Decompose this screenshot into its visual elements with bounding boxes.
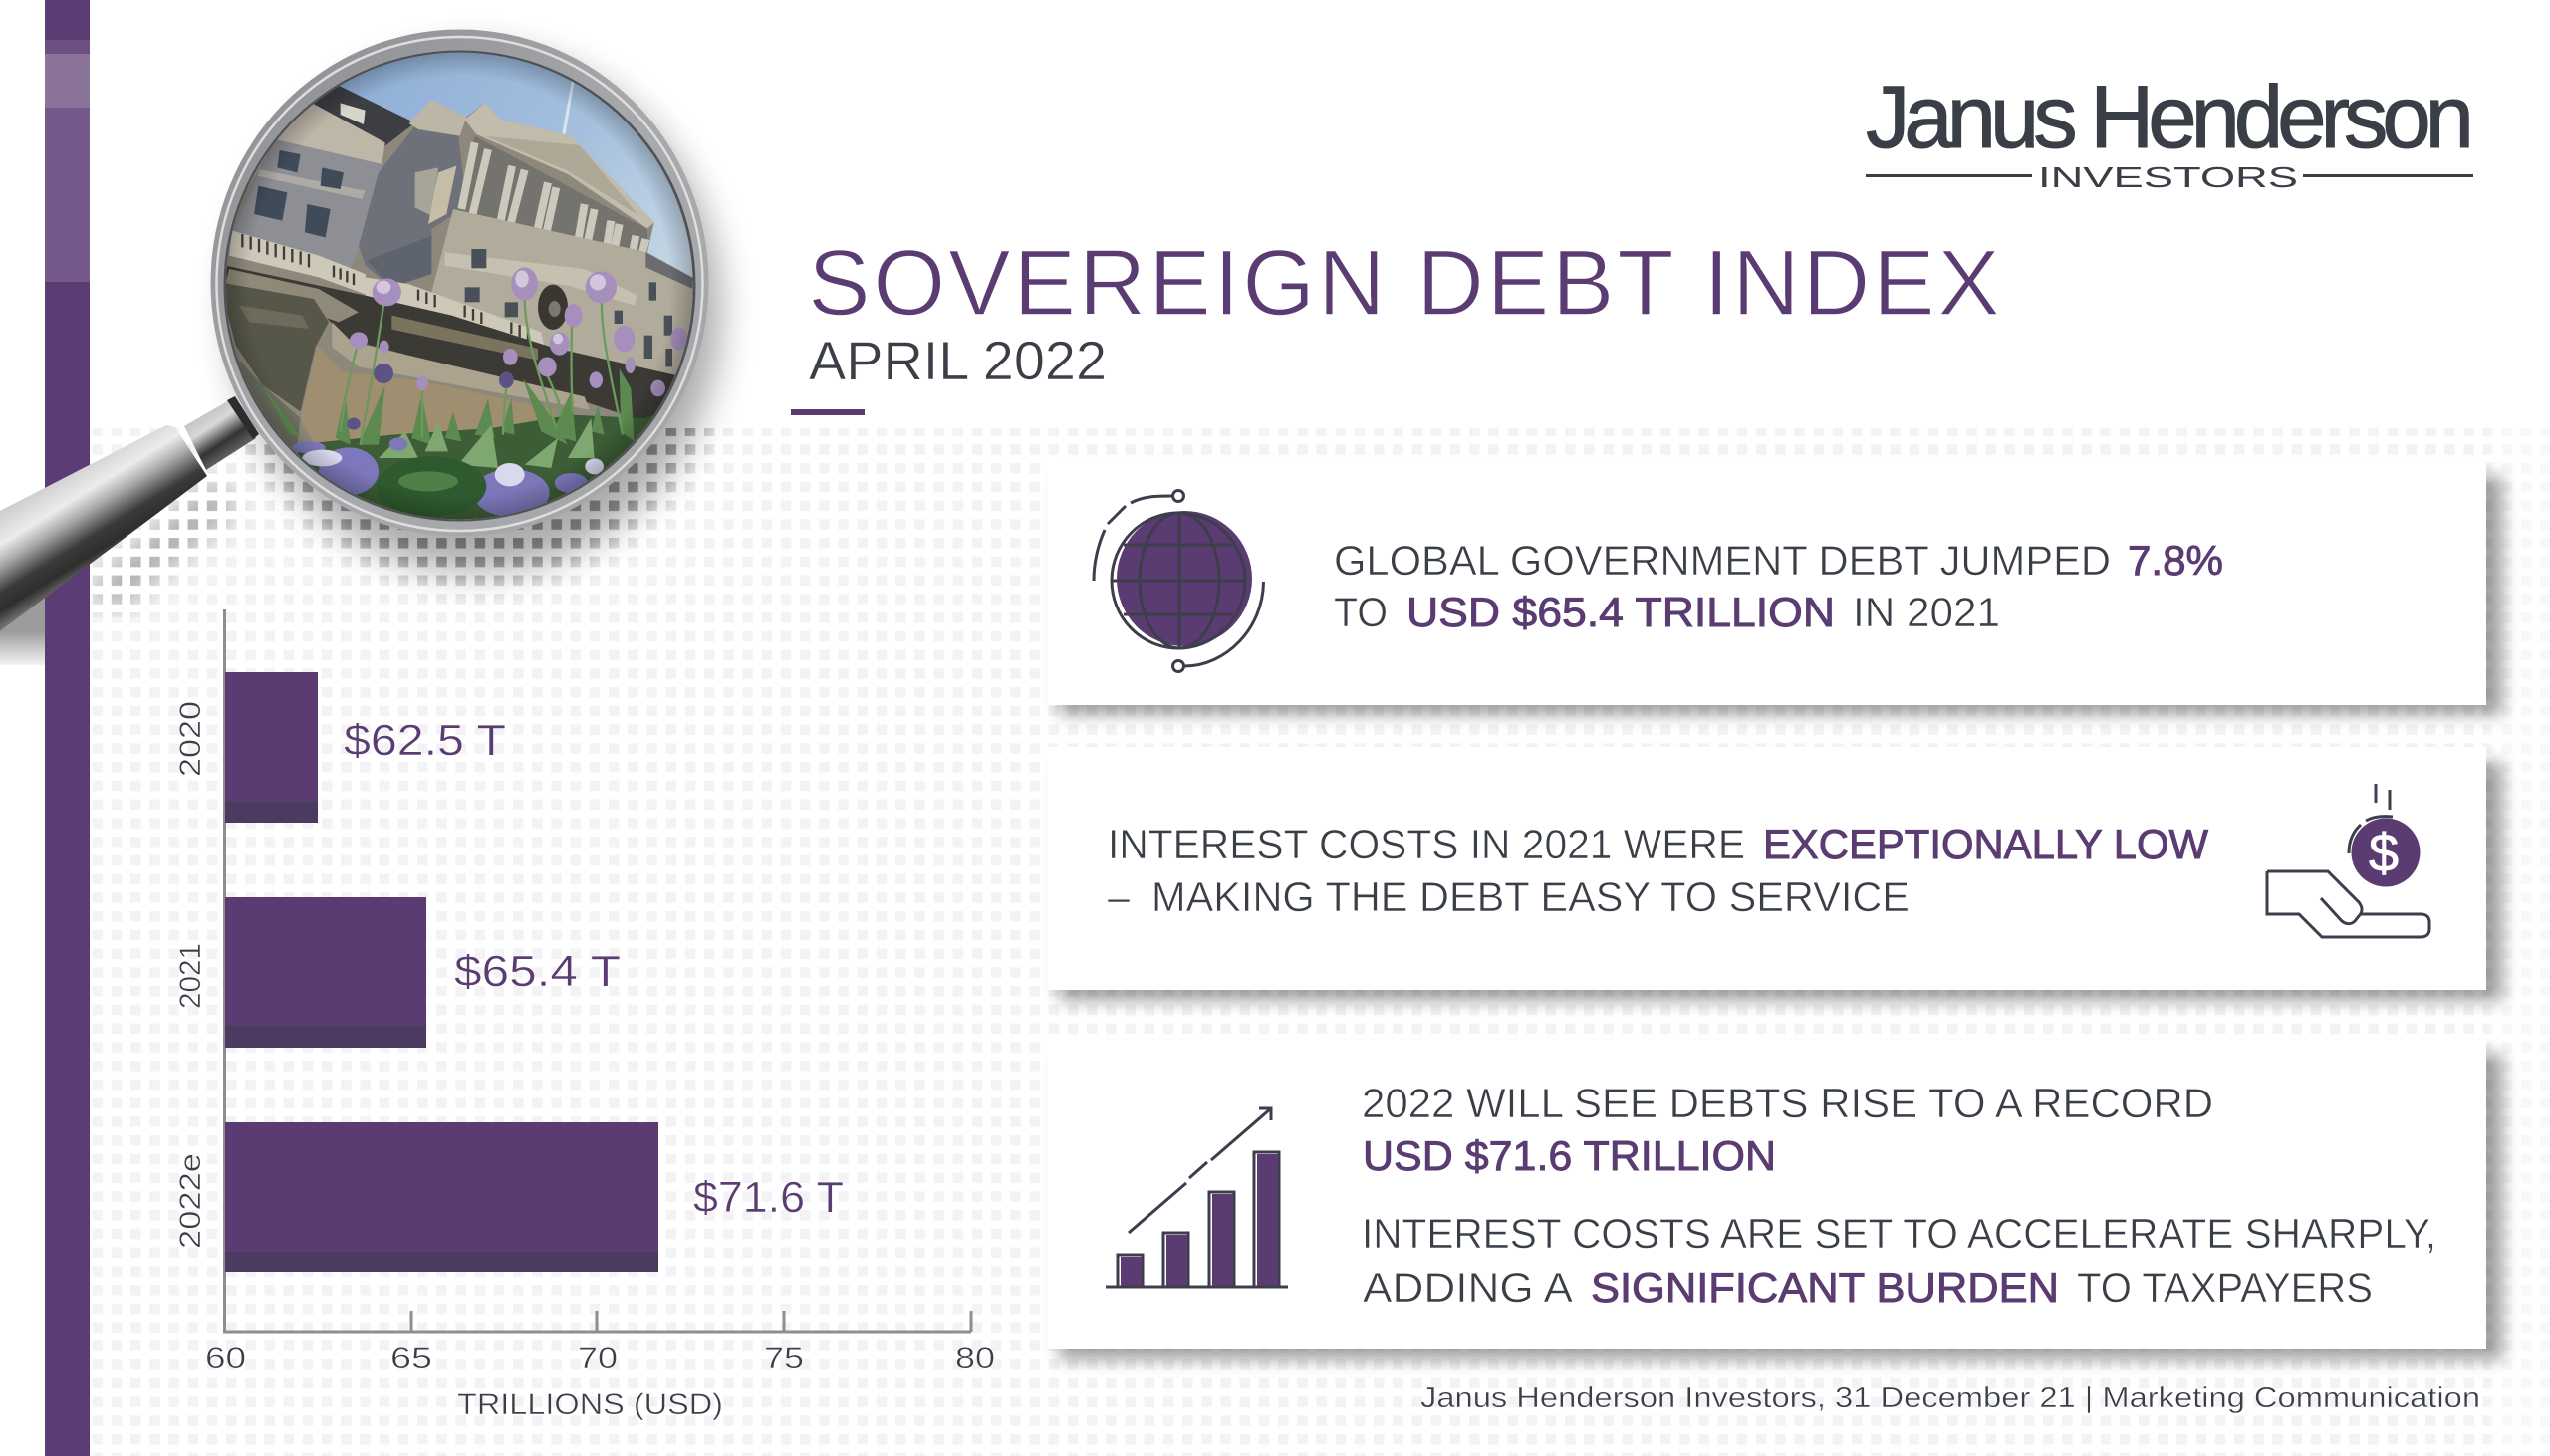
- panel: interest costs: [1048, 747, 2503, 1001]
- lower dark bands: [226, 266, 675, 423]
- text: record debts: 2022 WILL SEE DEBTS RISE TO A RECORD: [1362, 1080, 2213, 1126]
- text: record debts: TO TAXPAYERS: [2077, 1264, 2373, 1311]
- bar: 2022e: [225, 1122, 658, 1272]
- text: record debts: INTEREST COSTS ARE SET TO ACCELERATE SHARPLY,: [1362, 1210, 2436, 1257]
- x axis labels: 70: [578, 1342, 618, 1375]
- value labels: $71.6 T: [693, 1173, 844, 1222]
- subtitle: APRIL 2022: [809, 330, 1107, 391]
- x axis labels: [205, 1342, 995, 1375]
- text: debt jumped: TO: [1334, 589, 1388, 635]
- lens photo: [219, 47, 704, 538]
- text: record debts: SIGNIFICANT BURDEN: [1591, 1264, 2059, 1311]
- text: interest costs low: MAKING THE DEBT EASY TO SERVICE: [1151, 873, 1910, 920]
- year labels: [174, 701, 207, 1249]
- x axis title: TRILLIONS (USD): [457, 1388, 723, 1421]
- portico: [457, 135, 647, 253]
- footer source line: Janus Henderson Investors, 31 December 21 | Marketing Communication: [1420, 1382, 2480, 1414]
- year labels: 2022e: [174, 1153, 207, 1249]
- value labels: $62.5 T: [344, 716, 506, 765]
- year labels: 2020: [174, 701, 207, 777]
- magnifying glass with Bank of England photo: [0, 30, 709, 631]
- tulips: [350, 267, 687, 396]
- value labels: $65.4 T: [454, 947, 621, 996]
- icon: globe: [1094, 490, 1263, 671]
- x axis labels: 75: [764, 1342, 804, 1375]
- left colour bar: [45, 0, 90, 1456]
- icon: coin and hand: $: [2369, 824, 2399, 883]
- lens frame: [211, 30, 709, 536]
- logo: Janus Henderson Investors: INVESTORS: [2038, 162, 2298, 194]
- text: interest costs low: INTEREST COSTS IN 2021 WERE: [1108, 821, 1745, 867]
- text: record debts: ADDING A: [1363, 1264, 1573, 1311]
- building silhouette base: [219, 83, 704, 538]
- panel: global debt: [1048, 461, 2503, 715]
- text: debt jumped: IN 2021: [1853, 589, 2000, 635]
- pansies: [292, 437, 588, 517]
- title: SOVEREIGN DEBT INDEX: [808, 230, 2000, 335]
- left wing: [312, 83, 415, 146]
- text: debt jumped: [1334, 537, 2223, 635]
- x axis labels: 60: [205, 1342, 246, 1375]
- icon: coin and hand: [2267, 784, 2429, 937]
- text: debt jumped: 7.8%: [2128, 537, 2223, 584]
- text: interest costs low: [1108, 821, 2208, 920]
- x axis labels: 80: [955, 1342, 995, 1375]
- value labels: [344, 716, 844, 1222]
- grass: [297, 414, 653, 520]
- bar: 2021: [225, 897, 426, 1048]
- x axis labels: 65: [390, 1342, 432, 1375]
- text: interest costs low: –: [1108, 873, 1131, 920]
- accent dash: [791, 409, 865, 415]
- text: record debts: [1362, 1080, 2436, 1311]
- balustrades: [229, 231, 369, 296]
- text: interest costs low: EXCEPTIONALLY LOW: [1763, 821, 2208, 867]
- panel: 2022 outlook: [1048, 1040, 2503, 1360]
- axes and ticks: [225, 609, 971, 1332]
- icon: rising bar chart with arrow: [1106, 1108, 1288, 1287]
- logo: Janus Henderson Investors: Janus Henderson: [1866, 67, 2474, 166]
- text: debt jumped: USD $65.4 TRILLION: [1406, 589, 1835, 635]
- magnifying glass drop shadow: [0, 50, 807, 665]
- bar: 2020: [225, 672, 318, 823]
- dotted background pattern: [90, 428, 2550, 1456]
- podium: [431, 209, 704, 381]
- text: debt jumped: GLOBAL GOVERNMENT DEBT JUMPED: [1334, 537, 2111, 584]
- side facade: [359, 126, 466, 287]
- year labels: 2021: [174, 943, 207, 1009]
- bar chart: global debt trillions USD: [174, 609, 995, 1421]
- text: record debts: USD $71.6 TRILLION: [1363, 1132, 1776, 1179]
- handle: [0, 396, 259, 631]
